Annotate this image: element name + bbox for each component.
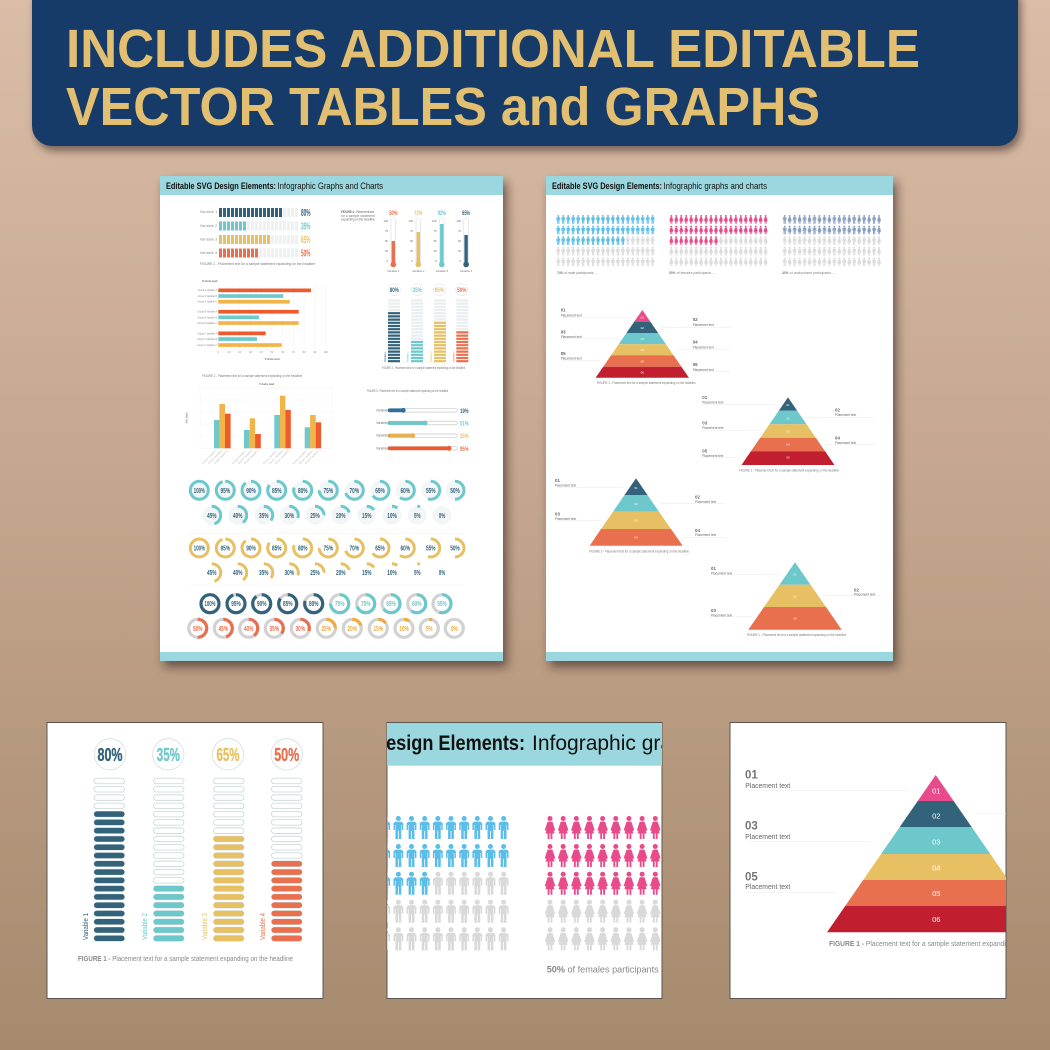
enlarged pyramid: 05	[932, 889, 940, 898]
thermometer charts: 75	[458, 229, 462, 233]
enlarged pyramid: 04	[932, 863, 940, 872]
pyramid: six levels: 01	[561, 308, 566, 313]
pyramid: five levels: Placement text	[835, 413, 856, 417]
pill progress bars: FIGURE 1 - Placement text for a sample statement expanding on the headline	[200, 262, 315, 266]
donut set: teal: 55%	[426, 488, 436, 495]
pyramid: five levels: Placement text	[835, 441, 856, 445]
donut set: yellow: 70%	[350, 546, 360, 552]
column chart: Y-Axis text	[259, 382, 274, 386]
panel: graphs and charts sheet	[160, 176, 503, 661]
stack: variable 3: Variable 3	[202, 913, 209, 940]
pyramid: three levels: Placement text	[854, 592, 875, 596]
stack: variable 1: Variable 1	[83, 913, 90, 940]
slider bars: 95%	[460, 446, 469, 453]
pyramid: four levels: 02	[634, 502, 638, 506]
callouts	[745, 770, 1006, 893]
thermometer charts: for a sample statement	[341, 214, 375, 218]
horizontal bar chart: 10	[228, 351, 231, 354]
pyramid: six levels: 03	[561, 329, 566, 334]
thermometer charts: 50%	[389, 210, 397, 217]
donut set: yellow: 90%	[246, 546, 256, 552]
donut set: multicolour on grey track: 85%	[283, 601, 293, 608]
enlarged pyramid: 01	[932, 786, 940, 795]
donut set: yellow: 45%	[207, 570, 217, 577]
donut set: yellow: 5%	[414, 570, 421, 577]
horizontal bar chart: Group C Variable C	[197, 344, 217, 347]
pyramid: four levels: Placement text	[695, 533, 716, 537]
horizontal bar chart: FIGURE 2 - Placement text for a sample statement expanding on the headline	[202, 374, 302, 378]
percentage badges: 65%	[216, 745, 240, 765]
percentage badges	[94, 739, 302, 770]
sheet heading: Editable SVG Design Elements:	[552, 181, 662, 191]
donut set: multicolour on grey track: 20%	[348, 626, 358, 633]
donut set: teal: 15%	[362, 513, 372, 520]
donut set: yellow: 35%	[259, 570, 269, 577]
donut set: teal: 10%	[387, 513, 397, 520]
donut set: teal: 80%	[298, 488, 308, 495]
donut set: multicolour on grey track: 65%	[386, 601, 396, 608]
horizontal bar chart: Group B Variable A	[198, 311, 217, 314]
vertical pill columns: Variable 1	[384, 351, 387, 362]
horizontal bar chart	[197, 279, 328, 378]
vertical pill columns: FIGURE 3 - Placement text for a sample statement expanding on the headline	[382, 366, 465, 370]
enlarged male pictogram	[380, 816, 509, 950]
thermometer charts: Variable 4	[460, 269, 473, 273]
pyramid: three levels: 03	[711, 608, 716, 613]
vertical pill columns: Variable 3	[430, 351, 433, 362]
column chart: Group B Variable B	[237, 449, 253, 465]
enlarged female pictogram	[545, 816, 674, 950]
column chart: Group D Variable A	[292, 449, 308, 465]
pictogram: male participants: 74% of male participants ....	[557, 271, 598, 275]
vertical pill columns: 65%	[435, 287, 444, 294]
pyramid: six levels: 04	[641, 348, 644, 352]
donut set: teal: 50%	[450, 488, 460, 495]
column chart: Group C Variable A	[262, 449, 278, 465]
pyramid: three levels: Placement text	[711, 572, 732, 576]
horizontal bar chart: Y-Axis text	[264, 357, 280, 361]
thermometer charts: 50	[458, 239, 462, 243]
pill progress bars: 65%	[301, 235, 311, 246]
donut set: yellow: 40%	[233, 570, 243, 577]
pill progress bars: Variable 2	[200, 224, 217, 228]
thermometer charts: 92%	[438, 210, 446, 217]
pyramid: four levels: Placement text	[555, 484, 576, 488]
caption: FIGURE 1 - Placement text for a sample statement expanding on the headline	[78, 956, 293, 963]
slider bars: FIGURE 5 - Placement text for a sample statement expanding on the headline	[367, 389, 448, 393]
donut set: yellow: 25%	[310, 570, 320, 577]
pyramid: three levels: 03	[793, 617, 797, 621]
thermometer charts: 25	[410, 249, 414, 253]
percentage badges: 35%	[157, 745, 180, 765]
enlarged sheet heading: Infographic graphs	[532, 732, 706, 755]
callouts: Placement text	[745, 783, 790, 790]
donut set: teal: 0%	[439, 513, 446, 520]
pyramid: three levels: 02	[793, 594, 797, 598]
donut set: teal: 40%	[233, 513, 243, 520]
donut set: teal: 35%	[259, 513, 269, 520]
enlarged pyramid: 03	[932, 837, 940, 846]
donut set: multicolour on grey track: 25%	[322, 626, 332, 633]
thermometer charts: 0	[460, 259, 462, 263]
pyramid: five levels: Placement text	[702, 426, 723, 430]
pyramid: three levels: 02	[854, 587, 859, 592]
donut set: teal: 60%	[401, 488, 411, 495]
horizontal bar chart: 0	[218, 351, 220, 354]
donut set: teal: 65%	[375, 488, 385, 495]
slider bars: Variable 2	[376, 421, 390, 425]
slider bars: 35%	[460, 433, 469, 440]
slider bars	[367, 389, 469, 453]
donut set: yellow: 15%	[362, 570, 372, 577]
donut set: teal: 100%	[194, 488, 205, 495]
thermometer charts: FIGURE 4 - Placement text	[341, 210, 374, 214]
column chart: Group D Variable C	[304, 449, 320, 465]
pyramid: five levels: 02	[786, 416, 790, 420]
horizontal bar chart: 40	[260, 351, 263, 354]
pyramid: five levels: 03	[786, 429, 790, 433]
donut set: teal: 90%	[246, 488, 256, 495]
vertical pill columns: Variable 2	[406, 351, 410, 362]
pyramid: four levels: 03	[555, 511, 560, 516]
pyramid: five levels: Placement text	[702, 454, 723, 458]
donut set: yellow: 10%	[387, 570, 397, 577]
thermometer charts: 0	[412, 259, 414, 263]
donut set: teal: 5%	[414, 513, 421, 520]
column chart: Group C Variable C	[274, 449, 290, 465]
sheet heading: Editable SVG Design Elements:	[166, 181, 276, 191]
donut set: yellow: 50%	[450, 546, 460, 552]
pyramid: six levels	[561, 308, 731, 385]
donut set: multicolour on grey track: 60%	[412, 601, 422, 608]
donut set: yellow: 20%	[336, 570, 346, 577]
pyramid: six levels: 05	[561, 351, 566, 356]
donut set: teal: 45%	[207, 513, 217, 520]
thermometer charts: 100	[384, 219, 389, 223]
donut set: multicolour on grey track	[189, 595, 463, 637]
sheet heading: Infographic graphs and charts	[664, 181, 767, 191]
donut set: teal: 85%	[272, 488, 282, 495]
horizontal bar chart: 20	[238, 351, 242, 354]
enlarged pyramid: 02	[932, 812, 940, 821]
donut set: teal: 95%	[221, 488, 231, 495]
pictogram: female participants: 50% of females participants ....	[669, 271, 716, 275]
pyramid: six levels: 01	[641, 315, 644, 319]
donut set: multicolour on grey track: 45%	[219, 626, 229, 633]
pill progress bars: 50%	[301, 248, 311, 260]
thermometer charts: Variable 2	[412, 269, 425, 273]
column chart: Group B Variable C	[243, 449, 259, 465]
thermometer charts: 75	[385, 229, 389, 233]
pyramid: five levels: FIGURE 2 - Placement text for a sample statement expanding on the headline	[739, 468, 839, 472]
panel: enlarged pictogram	[386, 722, 662, 999]
vertical pill columns: 50%	[457, 287, 466, 294]
pictogram: undisclosed participants	[782, 215, 881, 275]
donut set: yellow: 95%	[221, 546, 231, 552]
donut set: yellow: 75%	[324, 546, 334, 552]
callouts: 05	[745, 872, 758, 884]
enlarged sheet heading	[387, 723, 662, 766]
donut set: multicolour on grey track: 75%	[335, 601, 345, 608]
stack: variable 1	[83, 778, 124, 941]
pyramid: four levels: 03	[634, 519, 638, 523]
percentage badges: 50%	[274, 745, 299, 765]
donut set: teal: 25%	[310, 513, 320, 520]
vertical pill columns	[382, 284, 468, 370]
donut set: multicolour on grey track: 70%	[361, 601, 371, 608]
thermometer charts: 50	[434, 239, 437, 243]
stack: variable 3	[202, 778, 244, 941]
pyramid: five levels: 01	[702, 395, 708, 400]
donut set: teal: 20%	[336, 513, 346, 520]
horizontal bar chart: Group C Variable A	[197, 332, 217, 335]
enlarged pyramid: 06	[932, 915, 940, 924]
pyramid: six levels: Placement text	[561, 356, 582, 360]
donut set: multicolour on grey track: 0%	[451, 626, 458, 633]
donut set: teal	[190, 481, 464, 524]
pyramid: four levels: 04	[634, 536, 638, 540]
donut set: multicolour on grey track: 90%	[257, 601, 267, 608]
panel: pictograms and pyramids sheet	[546, 176, 893, 661]
donut set: multicolour on grey track: 15%	[374, 626, 384, 633]
pyramid: five levels: 02	[835, 408, 840, 413]
thermometer charts	[341, 210, 473, 273]
pyramid: three levels: FIGURE 1 - Placement text for a sample statement expanding on the headline	[747, 633, 846, 637]
donut set: teal: 75%	[324, 488, 334, 495]
pyramid: six levels: 06	[693, 362, 698, 367]
pyramid: six levels: Placement text	[561, 335, 582, 339]
thermometer charts: 25	[434, 249, 437, 253]
thermometer charts: 25	[458, 249, 462, 253]
thermometer charts: 0	[387, 259, 389, 263]
column chart: Group A Variable B	[208, 449, 223, 465]
horizontal bar chart: 100	[324, 351, 328, 354]
sheet heading: Infographic Graphs and Charts	[278, 181, 383, 191]
vertical pill columns: 80%	[390, 287, 399, 294]
callouts: Placement text	[745, 884, 790, 891]
thermometer charts: 100	[409, 219, 414, 223]
slider bars: 51%	[460, 420, 469, 428]
pill progress bars: Variable 3	[200, 238, 217, 242]
pyramid: four levels: 02	[695, 495, 700, 500]
donut set: multicolour on grey track: 50%	[193, 626, 203, 633]
pyramid: five levels: 05	[786, 456, 790, 460]
donut set: yellow: 60%	[401, 546, 411, 552]
pyramid: four levels: FIGURE 3 - Placement text for a sample statement expanding on the headline	[589, 549, 689, 553]
pyramid: six levels: 03	[641, 337, 644, 341]
horizontal bar chart: Group A Variable C	[198, 301, 217, 304]
horizontal bar chart: 90	[314, 351, 317, 354]
pyramid: six levels: FIGURE 1 - Placement text for a sample statement expanding on the headline	[597, 381, 696, 385]
pyramid: four levels: 04	[695, 528, 700, 533]
horizontal bar chart: Group A Variable A	[198, 289, 217, 292]
donut set: multicolour on grey track: 80%	[309, 601, 319, 608]
thermometer charts: 100	[457, 219, 462, 223]
pyramid: four levels: Placement text	[555, 517, 576, 521]
pyramid: six levels: 04	[693, 339, 698, 344]
pyramid: three levels: 01	[711, 566, 716, 571]
pyramid: five levels: 04	[835, 436, 840, 441]
panel: enlarged pill columns	[47, 722, 323, 998]
pill progress bars: 80%	[301, 208, 311, 219]
pyramid: five levels	[702, 395, 875, 472]
stack: variable 2	[142, 778, 184, 941]
donut set: yellow	[190, 539, 464, 582]
vertical pill columns: Variable 4	[452, 351, 456, 362]
column chart: Group A Variable C	[213, 449, 229, 465]
donut set: yellow: 55%	[426, 546, 436, 552]
pyramid: three levels: 01	[793, 572, 797, 576]
pyramid: six levels: 02	[641, 326, 644, 330]
title line 1: INCLUDES ADDITIONAL EDITABLE	[66, 19, 920, 79]
pill progress bars: 35%	[301, 222, 311, 232]
donut set: teal: 70%	[350, 488, 360, 495]
callouts: Placement text	[745, 834, 790, 841]
stack: variable 2: Variable 2	[142, 913, 149, 940]
column chart: Axis label	[184, 412, 188, 424]
pyramid: four levels	[555, 478, 725, 553]
horizontal bar chart: 70	[292, 351, 295, 354]
pyramid: five levels: Placement text	[702, 400, 723, 404]
donut set: multicolour on grey track: 95%	[231, 601, 241, 608]
stack: variable 4	[260, 778, 302, 941]
title line 2: VECTOR TABLES and GRAPHS	[66, 77, 820, 137]
stack: variable 4: Variable 4	[260, 913, 267, 940]
column chart: Group D Variable B	[298, 449, 314, 465]
column chart	[184, 382, 332, 465]
pyramid: six levels: Placement text	[693, 368, 714, 372]
callouts: 03	[745, 820, 758, 832]
pyramid: four levels: Placement text	[695, 500, 716, 504]
donut set: multicolour on grey track: 35%	[270, 626, 280, 633]
horizontal bar chart: Group A Variable B	[198, 295, 217, 298]
slider bars: Variable 4	[376, 446, 390, 450]
pyramid: four levels: 01	[555, 478, 560, 483]
pyramid: five levels: 03	[702, 421, 708, 426]
callouts: 01	[745, 770, 758, 782]
thermometer charts: 50	[385, 239, 389, 243]
pyramid: six levels: Placement text	[693, 323, 714, 327]
donut set: yellow: 85%	[272, 546, 282, 552]
pill progress bars: Variable 4	[200, 251, 217, 255]
thermometer charts: 50	[410, 239, 414, 243]
pyramid: three levels: Placement text	[711, 614, 732, 618]
slider bars: 19%	[460, 408, 469, 415]
pyramid: five levels: 05	[702, 448, 708, 453]
pyramid: six levels: 02	[693, 317, 698, 322]
horizontal bar chart: Group B Variable C	[197, 322, 217, 325]
vertical pill columns: 35%	[413, 287, 422, 294]
column chart: Group A Variable A	[202, 449, 217, 465]
thermometer charts: Variable 1	[387, 269, 400, 273]
thermometer charts: 25	[385, 249, 389, 253]
horizontal bar chart: 30	[249, 351, 252, 354]
caption: 50% of females participants	[547, 964, 659, 976]
thermometer charts: 72%	[414, 210, 422, 217]
thermometer charts: 65%	[462, 210, 470, 217]
pyramid: six levels: Placement text	[561, 314, 582, 318]
thermometer charts: 100	[432, 219, 437, 223]
column chart: Group C Variable B	[268, 449, 284, 465]
panel: enlarged pyramid	[730, 722, 1006, 999]
thermometer charts: 75	[410, 229, 414, 233]
donut set: multicolour on grey track: 5%	[426, 626, 433, 633]
pictogram: undisclosed participants: 40% of undisclosed participants ....	[782, 271, 836, 275]
pyramid: six levels: 06	[641, 370, 644, 374]
horizontal bar chart: X-Axis text	[202, 279, 218, 283]
slider bars: Variable 1	[376, 408, 390, 412]
pictogram: male participants	[556, 215, 654, 275]
donut set: yellow: 100%	[194, 546, 205, 552]
donut set: yellow: 80%	[298, 546, 308, 552]
donut set: multicolour on grey track: 30%	[296, 626, 306, 633]
horizontal bar chart: Group B Variable B	[197, 316, 217, 319]
thermometer charts: expanding on the headline	[341, 218, 375, 222]
thermometer charts: 75	[434, 229, 437, 233]
donut set: multicolour on grey track: 100%	[204, 601, 216, 608]
horizontal bar chart: 50	[271, 351, 274, 354]
pyramid: five levels: 04	[786, 442, 790, 446]
pyramid: six levels: Placement text	[693, 346, 714, 350]
pill progress bars: Variable 1	[200, 210, 217, 214]
donut set: teal: 30%	[285, 513, 295, 520]
donut set: yellow: 65%	[375, 546, 385, 552]
column chart: Group B Variable A	[231, 449, 247, 465]
pyramid: four levels: 01	[634, 486, 638, 490]
donut set: multicolour on grey track: 10%	[399, 626, 409, 633]
pyramid: three levels	[711, 562, 882, 637]
pictogram: female participants	[669, 215, 768, 275]
pyramid: five levels: 01	[786, 403, 790, 407]
slider bars: Variable 3	[376, 434, 390, 438]
horizontal bar chart: Group C Variable B	[197, 338, 217, 341]
donut set: multicolour on grey track: 55%	[437, 601, 447, 608]
donut set: multicolour on grey track: 40%	[244, 626, 254, 633]
pyramid: six levels: 05	[641, 359, 644, 363]
pill progress bars	[200, 208, 315, 266]
horizontal bar chart: 60	[281, 351, 285, 354]
enlarged sheet heading: Design Elements:	[373, 732, 525, 755]
horizontal bar chart: 80	[303, 351, 306, 354]
percentage badges: 80%	[98, 745, 122, 765]
donut set: yellow: 0%	[439, 570, 446, 577]
title banner	[32, 0, 1018, 146]
thermometer charts: 0	[435, 259, 437, 263]
thermometer charts: Variable 3	[436, 269, 448, 273]
enlarged pyramid	[827, 775, 1006, 932]
donut set: yellow: 30%	[285, 570, 295, 577]
